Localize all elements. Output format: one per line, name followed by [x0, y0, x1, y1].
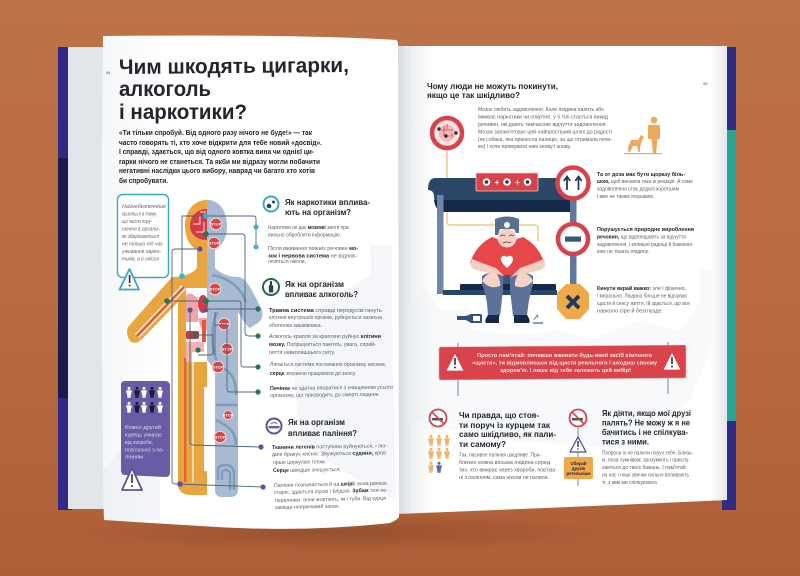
paragraph: brain likes pleasure: речовин, які дають тимчасове відчуття задоволення. [478, 122, 607, 128]
red banner: «щастя», ти відмовляєшся від щастя реального і шкодиш своєму [472, 360, 658, 366]
section: passive smoking: ні з палінням, сама ніколи не палила. [459, 475, 549, 481]
text: hard to quit: навколо сіре й безглузде. [597, 308, 663, 314]
heading: why people cannot quit [427, 82, 558, 100]
section: friends smoke: ті, з ким ми спілкуємося. [602, 480, 658, 486]
bench [443, 284, 557, 295]
section: drugs: зок і нервова система не віднов- [268, 254, 357, 260]
stop signs: STOP [219, 322, 230, 326]
icon: warning sign [570, 437, 586, 452]
title: алкоголь [119, 78, 211, 101]
faint city skyline right page [410, 270, 712, 450]
section: alcohol: серце змушене працювати до зносу. [270, 371, 356, 377]
orange note: ретельніше [567, 471, 591, 476]
sign on roof: + [515, 178, 520, 187]
section: passive smoking [428, 410, 557, 481]
icon: no smoking [430, 410, 446, 426]
page number 94: 94 [106, 70, 111, 75]
section: friends smoke: палять? Не можу ж я не [602, 418, 690, 428]
stop signs: STOP [213, 364, 224, 370]
red banner [439, 342, 686, 396]
connector dots [164, 213, 266, 490]
section: alcohol: няття навколишнього світу. [269, 350, 335, 356]
brain [190, 209, 207, 240]
stop signs: STOP [215, 434, 226, 440]
text: hard to quit: і морально. Людина більше не відчуває [597, 294, 687, 300]
stop signs: STOP [210, 286, 221, 292]
signpost [564, 410, 593, 486]
panel: purple statistic: від хвороби, [125, 440, 153, 446]
section: smoking: Паління позначається й на шкірі: вона раніше [274, 480, 387, 489]
orange half of body [127, 200, 207, 495]
section: passive smoking: ти поруч із курцем так [459, 421, 551, 430]
stop signs: STOP [209, 240, 220, 246]
text: natural production: вже не тішать людину. [597, 249, 649, 255]
callout: danger note: не тільки під час [122, 242, 163, 248]
page number 95: 95 [703, 81, 708, 86]
section: friends smoke: на нас і наші звички сильно впливають [602, 472, 689, 478]
panel: purple statistic: пов'язаної з па- [125, 448, 164, 454]
icon: warning triangle purple [122, 468, 142, 490]
head [498, 228, 516, 248]
section: passive smoking: ти самому? [459, 440, 506, 449]
section: smoking: завжди неприємний запах. [275, 503, 340, 511]
stop signs: STOP [222, 346, 233, 352]
section: smoking: впливає паління? [288, 429, 357, 438]
shirt [470, 237, 544, 275]
section: alcohol: Алкоголь крапля за краплею руйнує клітини [269, 333, 381, 340]
heart badge [501, 256, 513, 268]
section: alcohol: організму, що призводить до смерті людини. [270, 392, 380, 399]
icon: banner warning left [446, 353, 464, 371]
section: friends smoke: тися з ними. [602, 438, 649, 446]
blue body channels [212, 275, 246, 490]
intro text: негативні наслідки цього вибору, навряд чи багато хто хотів [119, 166, 316, 175]
sign: no entry [558, 224, 588, 254]
title [119, 54, 349, 124]
panel: purple statistic: курець умирає [125, 432, 162, 438]
sign: orange octagon [557, 284, 589, 319]
arm vein [137, 287, 184, 336]
panel: purple statistic [121, 381, 170, 490]
pole between signs [570, 195, 576, 295]
intro text: гарки нічого не станеться. Та якби ми відразу могли побачити [119, 157, 320, 166]
paragraph: brain likes pleasure: (як собака, яка принесла палицю, за що отримала печи- [478, 137, 612, 143]
section: friends smoke: кі, поза сумнівом, зрозуміють і прислу- [602, 458, 690, 464]
text: natural production: речовин, що відповідають за відчуття [597, 234, 686, 240]
section: smoking: старіє, здається сірою і блідою. Зубам теж не- [274, 487, 388, 496]
text: natural production: задоволення, і колишні радощі й бажання [597, 241, 692, 248]
section: friends smoke: Як діяти, якщо мої друзі [602, 409, 691, 418]
section: friends smoke: Попроси їх не палити поруч тебе. Близь- [602, 450, 693, 456]
section: smoking: дині бракує кисню. Звужуються судини, кров [272, 450, 386, 458]
callout: danger note: що часто пору- [122, 219, 152, 225]
section: friends smoke: хаються до твоїх бажань. І пам'ятай: [602, 464, 687, 471]
forearms [471, 259, 506, 278]
section: passive smoking: тих, хто вмирає через хвороби, пов'яза- [459, 468, 557, 474]
bottle on the floor [457, 314, 482, 323]
callout: danger note: криється в тому, [122, 212, 157, 218]
text: dose [597, 171, 693, 200]
faint city skyline left page [103, 245, 396, 520]
bus stop roof [428, 178, 572, 212]
blue half of body [207, 200, 262, 497]
paragraph: brain likes pleasure: Мозок запам'ятовує цей найпростіший шлях до радості [478, 128, 612, 136]
section: drugs: Після вживання певних речовин мо- [268, 246, 358, 252]
inner left page behind [68, 47, 108, 509]
section: smoking: Тканини легенів поступово руйнуються, і лю- [272, 442, 387, 451]
sign: arrows up [558, 168, 588, 198]
icon: person with dog [624, 117, 662, 154]
stop signs [208, 218, 234, 443]
section: drugs: вильно обробляти інформацію. [268, 232, 341, 238]
icon: banner warning right [663, 352, 681, 370]
panel: purple statistic: лінням [125, 454, 143, 460]
shoes [485, 315, 499, 323]
leg stripes [184, 358, 212, 482]
section: alcohol: Травна система справді передусім гинуть [269, 308, 382, 314]
sitting man [470, 216, 545, 323]
section: alcohol: Як на організм [285, 280, 344, 289]
paragraph: brain likes pleasure: во) і хоче прямувати ним знову і знову. [478, 144, 571, 150]
paragraph: brain likes pleasure: вживає наркотики чи спиртне, у її тілі стається викид [478, 114, 609, 120]
section: drugs: люються ніколи. [268, 259, 306, 265]
text: dose: шою, щоб виникла така ж реакція. А саме [597, 179, 693, 185]
book cover [58, 47, 736, 510]
section: alcohol: мозку. Погіршуються пам'ять, увага, сприй- [269, 341, 376, 348]
section: friends smoke: бачитись і не спілкува- [602, 427, 688, 437]
icon: people row [126, 387, 163, 413]
sign on roof: + [495, 178, 500, 187]
section: drugs: ють на організм? [285, 208, 351, 217]
orange note [564, 457, 593, 479]
section: friends smoke [564, 409, 693, 486]
icon: warning triangle blue [120, 269, 139, 290]
paragraph: brain likes pleasure: Мозок любить задоволення. Коли людина палить або [478, 107, 604, 113]
section: drugs: Як наркотики вплива- [285, 198, 370, 207]
section: alcohol: оболонка кишківника. [269, 323, 322, 329]
section: drugs: Наркотики не дає мозкові змоги пра- [268, 225, 350, 231]
section: passive smoking: близно кожна восьма людина серед [459, 460, 551, 466]
section: alcohol: Лягається система постачання організму киснем, [270, 362, 386, 368]
red banner: Просто пам'ятай: почавши вживати будь-який засіб хімічного [477, 352, 652, 359]
section: smoking: переливки: вони жовтіють, як і губи. Від курця [275, 496, 386, 504]
stop signs: STOP [223, 412, 234, 418]
callout: danger note: шення в організ- [122, 226, 160, 232]
intro text: часто говорять ті, хто хоче відкрити для тебе новий «досвід». [119, 138, 322, 147]
right page [396, 46, 727, 514]
icon: brain sign [432, 118, 538, 241]
intro text: «Ти тільки спробуй. Від одного разу нічого не буде!» — так [119, 128, 312, 137]
section: smoking: Серце швидше зношується. [273, 467, 341, 474]
callout: danger note: мі зберігаються [122, 234, 159, 240]
text: hard to quit [597, 285, 690, 314]
section: smoking [266, 418, 388, 511]
section: alcohol [263, 279, 393, 399]
illustration: bus stop [428, 168, 589, 323]
section: smoking: гірше циркулює тілом. [273, 459, 326, 466]
intro text: би спробувати. [119, 176, 168, 185]
body illustration [127, 200, 266, 497]
section: alcohol: клітини внутрішніх органів, руйнується захисна [269, 314, 382, 321]
chest cavity and organs [186, 288, 208, 362]
stop signs: STOP [211, 222, 222, 226]
section: alcohol: впливає алкоголь? [285, 290, 358, 299]
icon: cigarette [266, 418, 282, 434]
intro text [119, 128, 322, 185]
text: dose: задоволення стає дедалі коротшим [597, 186, 679, 192]
heading: why people cannot quit: Чому люди не можуть покинути, [427, 82, 558, 91]
heading: why people cannot quit: якщо це так шкідливо? [427, 91, 520, 100]
text: natural production [597, 226, 694, 255]
intro text: І справді, здається, що від одного ковтка вина чи однієї ци- [119, 147, 315, 156]
callout: danger note: уживання нарко- [121, 249, 161, 255]
callout: danger note: тиків, а й опісля [122, 256, 159, 262]
section: passive smoking: само шкідливо, як пали- [459, 430, 556, 439]
connector wires [167, 216, 263, 487]
text: hard to quit: Кинути вкрай важко: зле і фізично, [597, 285, 686, 292]
callout: danger note [118, 194, 168, 290]
text: dose: і вже не таким яскравим. [597, 194, 654, 200]
title: Чим шкодять цигарки, [119, 54, 349, 79]
section: smoking: Як на організм [288, 418, 345, 427]
title: і наркотики? [119, 101, 247, 124]
left page [102, 36, 399, 529]
orange note: Обирай [571, 461, 587, 466]
legs [482, 273, 503, 316]
paragraph: brain likes pleasure [478, 107, 612, 150]
icon: people grid [428, 435, 450, 473]
section: drugs [264, 196, 370, 265]
orange note: друзів [572, 466, 586, 471]
text: hard to quit: щастя й сенсу життя, їй здається, що все [597, 300, 690, 307]
icon: no smoking sign [570, 410, 586, 426]
cigarette on the floor [533, 315, 543, 323]
section: passive smoking: Чи правда, що стоя- [459, 411, 539, 420]
sign on roof [476, 173, 538, 191]
panel: purple statistic: Кожен другий [125, 424, 161, 431]
icon: pills [264, 196, 278, 212]
callout: danger note: Найнебезпечніше [122, 203, 166, 210]
text: natural production: Порушується природне вироблення [597, 226, 694, 233]
section: alcohol: Печінка не здатна впоратися з очищенням усього [270, 385, 393, 392]
section: passive smoking: Так, пасивне паління шкідливе. При- [459, 452, 541, 458]
book shadow [60, 512, 620, 552]
text: dose: Та от доза має бути щоразу біль- [597, 171, 685, 178]
icon: bottle [263, 279, 279, 295]
red banner: здоров'ю. І лише від тебе залежить цей вибір! [500, 367, 631, 374]
